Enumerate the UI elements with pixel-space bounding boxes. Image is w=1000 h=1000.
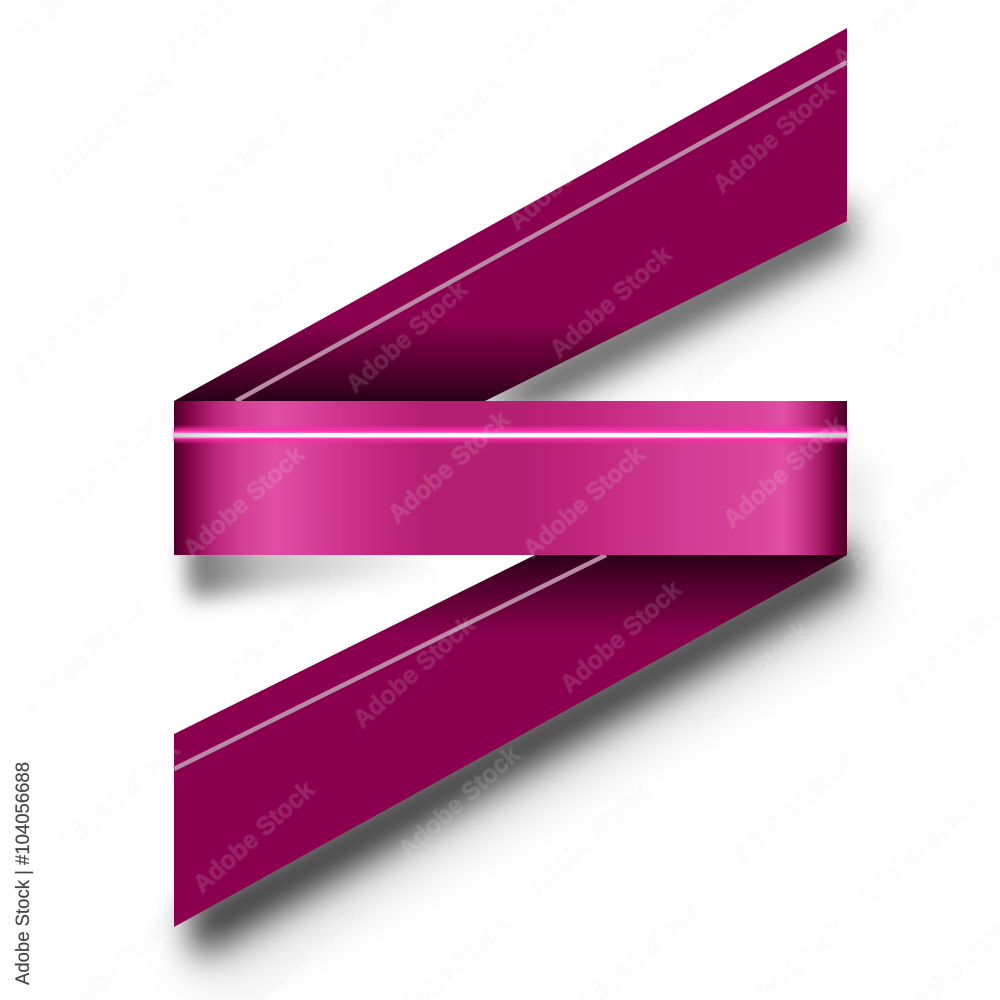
watermark pattern: Adobe Stock	[348, 610, 480, 734]
middle ribbon band	[174, 401, 847, 555]
watermark pattern: Adobe Stock	[383, 405, 515, 529]
lower ribbon band	[174, 555, 847, 927]
watermark pattern: Adobe Stock	[213, 232, 345, 356]
watermark pattern: Adobe Stock	[728, 745, 860, 869]
watermark pattern: Adobe Stock	[53, 735, 185, 859]
watermark pattern: Adobe Stock	[169, 105, 301, 229]
shadow: upper ribbon band	[470, 200, 872, 410]
watermark pattern: Adobe Stock	[683, 615, 815, 739]
watermark pattern: Adobe Stock	[555, 575, 687, 699]
watermark pattern: Adobe Stock	[675, 280, 807, 404]
watermark pattern: Adobe Stock	[8, 265, 140, 389]
shadow: lower ribbon band	[188, 538, 880, 985]
watermark pattern: Adobe Stock	[503, 112, 635, 236]
watermark pattern: Adobe Stock	[838, 115, 970, 239]
watermark pattern: Adobe Stock	[393, 740, 525, 864]
watermark pattern: Adobe Stock	[178, 440, 310, 564]
lower band pinstripe	[174, 555, 606, 769]
watermark pattern: Adobe Stock	[188, 775, 320, 899]
watermark pattern: Adobe Stock	[375, 70, 507, 194]
upper ribbon band	[174, 28, 847, 401]
watermark pattern: Adobe Stock	[518, 440, 650, 564]
upper band pinstripe	[236, 62, 847, 401]
watermark pattern: Adobe Stock	[341, 275, 473, 399]
watermark pattern: Adobe Stock	[223, 562, 355, 686]
watermark pattern: Adobe Stock	[46, 400, 178, 524]
watermark pattern: Adobe Stock	[843, 452, 975, 576]
watermark pattern: Adobe Stock	[545, 240, 677, 364]
stock id caption: Adobe Stock | #104056688	[13, 762, 34, 985]
watermark pattern: Adobe Stock	[718, 410, 850, 534]
watermark pattern: Adobe Stock	[523, 778, 655, 902]
shadow: middle ribbon band	[186, 540, 430, 598]
watermark pattern: Adobe Stock	[18, 595, 150, 719]
watermark pattern: Adobe Stock	[853, 788, 985, 912]
watermark pattern: Adobe Stock	[708, 75, 840, 199]
watermark pattern: Adobe Stock	[43, 65, 175, 189]
glowing pink line	[174, 428, 847, 442]
shadow: right side of middle band	[835, 450, 866, 560]
